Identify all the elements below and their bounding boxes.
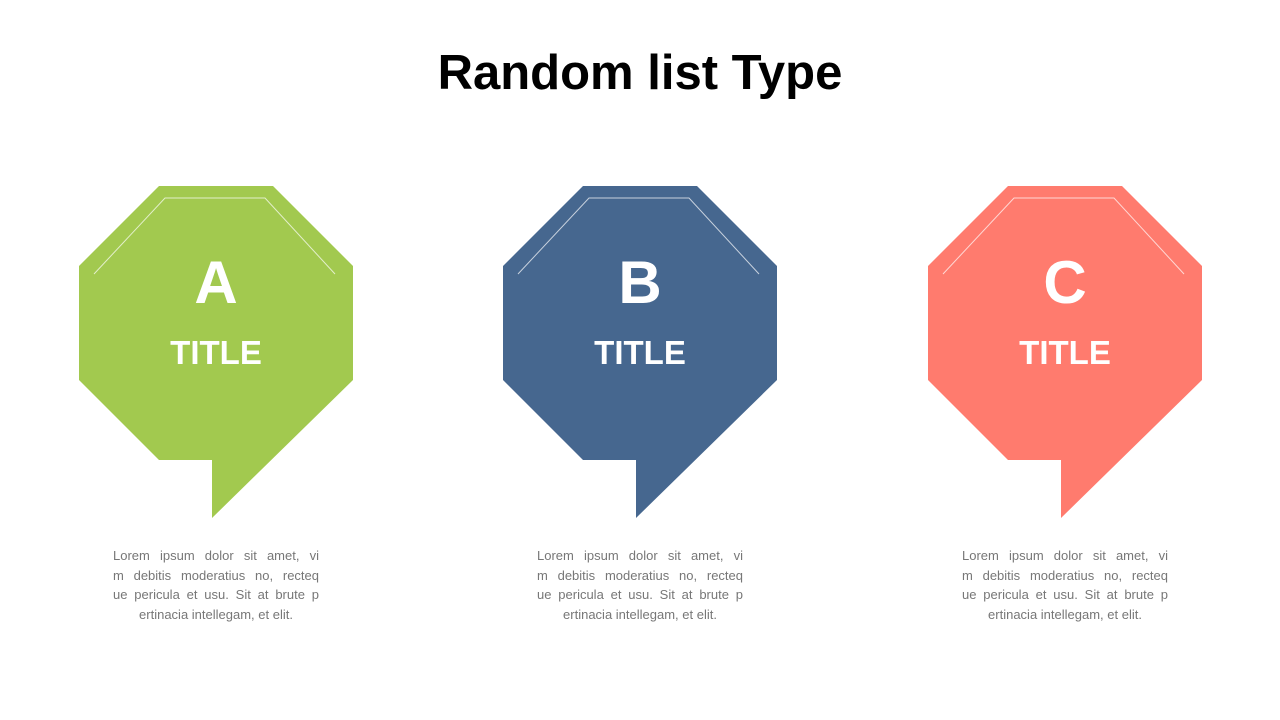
text C: [962, 548, 1168, 622]
text A: m debitis moderatius no, recteq: [113, 568, 319, 582]
text C: Lorem ipsum dolor sit amet, vi: [962, 548, 1168, 563]
title B: TITLE: [594, 334, 686, 371]
panel: A: [79, 186, 353, 518]
text A: ertinacia intellegam, et elit.: [139, 606, 293, 622]
panel: B: [503, 186, 777, 518]
text A: ue pericula et usu. Sit at brute p: [113, 587, 319, 602]
text B: ertinacia intellegam, et elit.: [563, 606, 717, 622]
letter B: B: [618, 249, 662, 316]
text B: [537, 548, 743, 622]
text A: [113, 548, 319, 622]
text A: Lorem ipsum dolor sit amet, vi: [113, 548, 319, 563]
letter A: A: [194, 249, 238, 316]
text C: ue pericula et usu. Sit at brute p: [962, 587, 1168, 602]
text B: m debitis moderatius no, recteq: [537, 568, 743, 582]
text B: ue pericula et usu. Sit at brute p: [537, 587, 743, 602]
title A: TITLE: [170, 334, 262, 371]
panel: C: [928, 186, 1202, 518]
letter C: C: [1043, 249, 1087, 316]
title: Random list Type: [438, 46, 842, 100]
text C: ertinacia intellegam, et elit.: [988, 606, 1142, 622]
title C: TITLE: [1019, 334, 1111, 371]
text C: m debitis moderatius no, recteq: [962, 568, 1168, 582]
text B: Lorem ipsum dolor sit amet, vi: [537, 548, 743, 563]
